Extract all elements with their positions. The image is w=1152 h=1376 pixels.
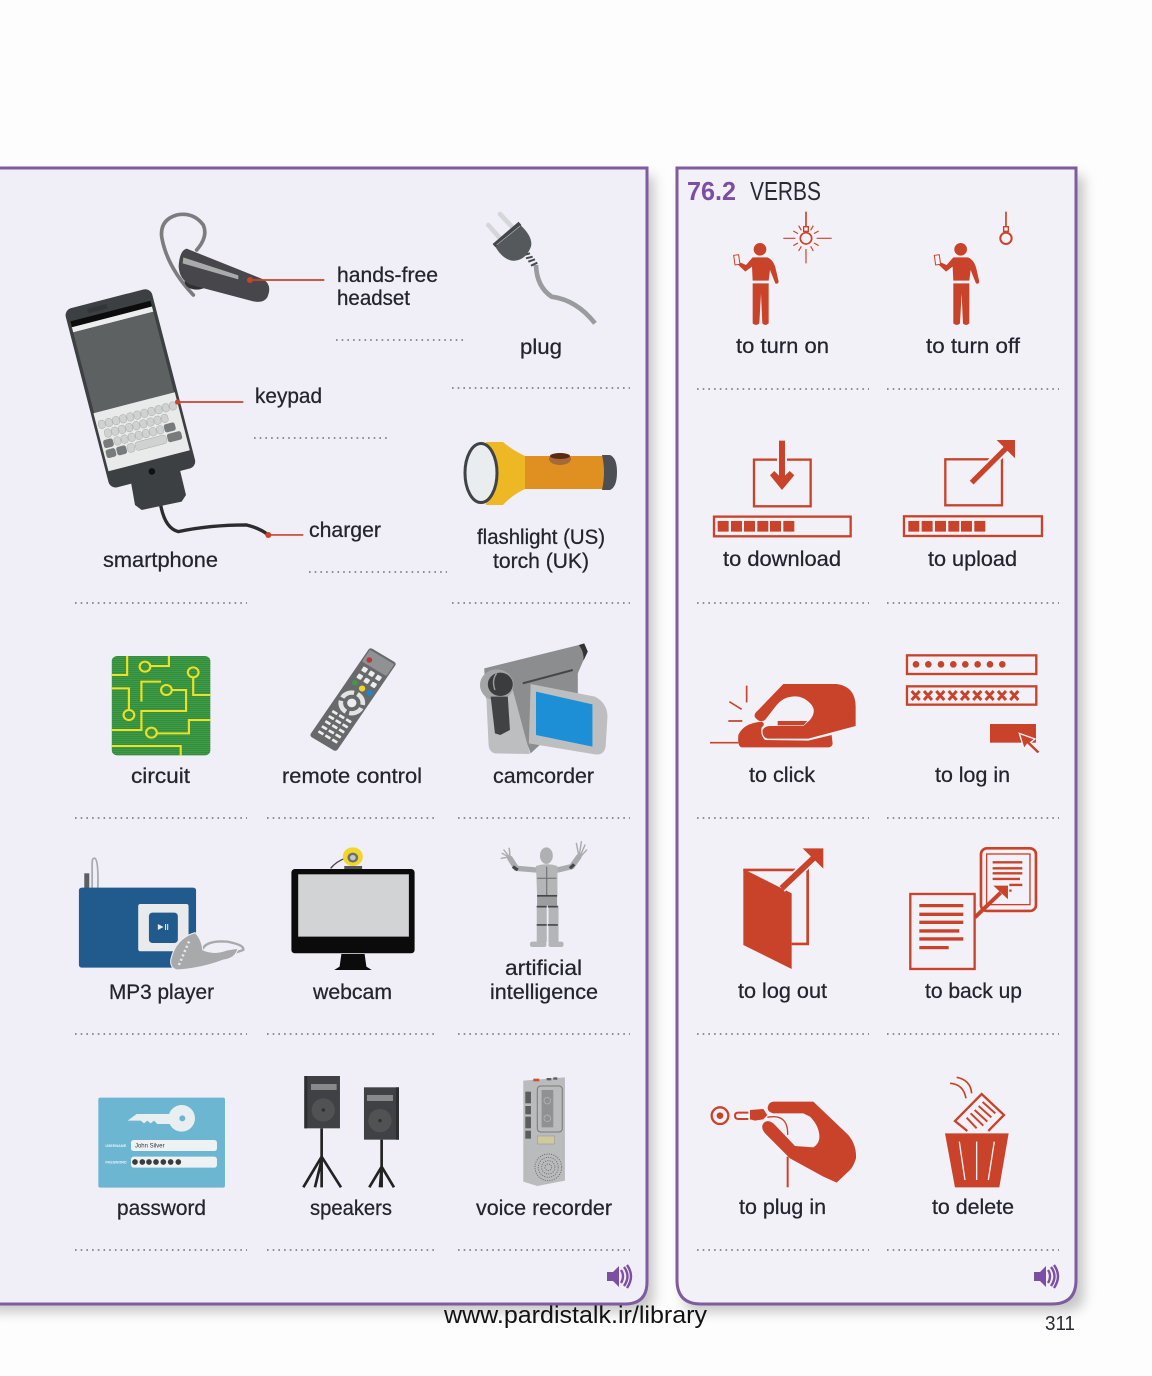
label: smartphone: smartphone — [103, 549, 218, 572]
icon: webcam on monitor — [291, 847, 415, 970]
label: hands-free headset: hands-free — [337, 264, 438, 287]
label: hands-free headset: headset — [337, 287, 410, 310]
icon: to delete — [945, 1077, 1009, 1187]
label: hands-free headset — [337, 264, 438, 310]
icon: robot, artificial intelligence — [501, 842, 587, 947]
panel: devices — [0, 168, 654, 1312]
label: flashlight (US) torch (UK) — [477, 526, 605, 573]
panel: 76.2 verbs — [677, 168, 1084, 1312]
icon: circuit — [112, 656, 210, 755]
label: keypad: keypad — [255, 385, 322, 408]
icon: to click — [710, 684, 856, 747]
icon: audio speaker, right panel — [1034, 1265, 1058, 1288]
label: to log out: to log out — [738, 980, 827, 1003]
icon: to turn on — [734, 212, 832, 325]
label: speakers: speakers — [310, 1197, 392, 1220]
icon: to upload — [904, 440, 1042, 536]
label: camcorder: camcorder — [493, 765, 594, 788]
icon: hands-free headset — [162, 214, 324, 302]
heading: 76.2 verbs: VERBS — [750, 176, 821, 206]
label: plug: plug — [520, 336, 562, 359]
icon: to download — [714, 441, 851, 536]
label: MP3 player: MP3 player — [109, 981, 214, 1004]
icon: plug — [488, 214, 595, 323]
icon: audio speaker, left panel — [607, 1265, 631, 1288]
label: to download: to download — [723, 548, 841, 571]
icon: to log out — [743, 848, 823, 969]
answer lines: verbs — [697, 389, 1059, 1250]
label: charger: charger — [309, 519, 381, 542]
label: circuit: circuit — [131, 765, 190, 788]
icon: to back up — [910, 848, 1036, 969]
heading: 76.2 verbs: 76.2 — [687, 176, 736, 206]
icon: password card: John Silver — [135, 1144, 165, 1150]
icon: to plug in — [712, 1102, 856, 1187]
label: artificial intelligence — [490, 957, 598, 1004]
heading: 76.2 verbs — [687, 176, 821, 206]
icon: password card — [98, 1098, 225, 1188]
label: to turn off: to turn off — [926, 335, 1020, 358]
label: password: password — [117, 1197, 206, 1220]
website watermark: www.pardistalk.ir/library — [443, 1302, 707, 1329]
label: to back up: to back up — [925, 980, 1022, 1003]
icon: password card: USERNAME — [105, 1144, 127, 1148]
label: to delete: to delete — [932, 1196, 1014, 1219]
label: to upload: to upload — [928, 548, 1017, 571]
page number: 311 — [1045, 1313, 1075, 1335]
label: voice recorder: voice recorder — [476, 1197, 612, 1220]
icon: password card: PASSWORD — [105, 1160, 127, 1164]
label: to click: to click — [749, 764, 816, 787]
label: flashlight (US) torch (UK): torch (UK) — [493, 550, 589, 573]
label: artificial intelligence: artificial — [505, 957, 582, 980]
label: remote control: remote control — [282, 765, 422, 788]
label: artificial intelligence: intelligence — [490, 981, 598, 1004]
icon: speakers — [303, 1076, 399, 1187]
icon: to log in — [907, 655, 1041, 754]
icon: to turn off — [934, 212, 1012, 325]
label: webcam: webcam — [312, 981, 392, 1004]
label: to turn on: to turn on — [736, 335, 829, 358]
icon: camcorder — [480, 643, 607, 754]
icon: remote control — [309, 647, 397, 752]
icon: MP3 player — [79, 858, 243, 970]
icon: smartphone with charger — [64, 288, 303, 538]
label: to log in: to log in — [935, 764, 1010, 787]
label: flashlight (US) torch (UK): flashlight (US) — [477, 526, 605, 549]
label: to plug in: to plug in — [739, 1196, 826, 1219]
answer lines: devices — [75, 340, 630, 1250]
icon: voice recorder — [523, 1077, 565, 1186]
icon: flashlight — [465, 442, 617, 505]
